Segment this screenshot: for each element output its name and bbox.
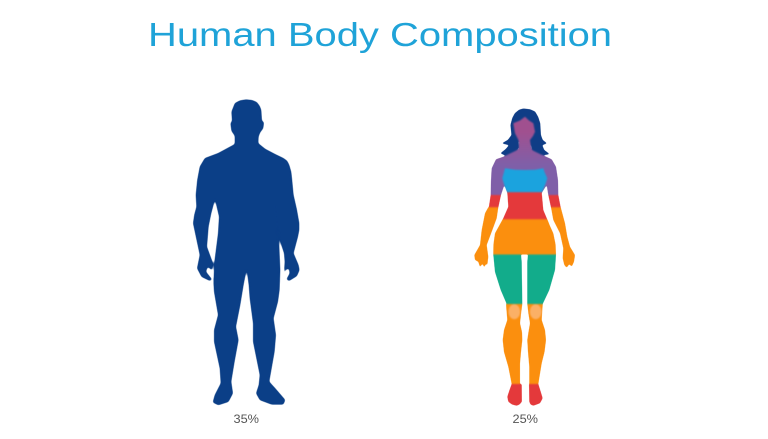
- knee highlights: [508, 304, 542, 319]
- male figure silhouette: [193, 100, 299, 405]
- lower legs: [503, 304, 546, 384]
- hair: [501, 109, 549, 156]
- thighs: [493, 254, 556, 304]
- feet: [507, 384, 543, 406]
- upper body, neck, face and upper arms: [491, 117, 558, 195]
- hips and lower arms: [474, 207, 575, 268]
- female percentage label: 25%: [512, 414, 538, 426]
- title: Human Body Composition: [148, 16, 612, 53]
- waist band and upper forearm bands: [489, 192, 561, 220]
- chest band: [502, 168, 547, 192]
- male percentage label: 35%: [234, 414, 259, 426]
- female figure: [474, 109, 575, 406]
